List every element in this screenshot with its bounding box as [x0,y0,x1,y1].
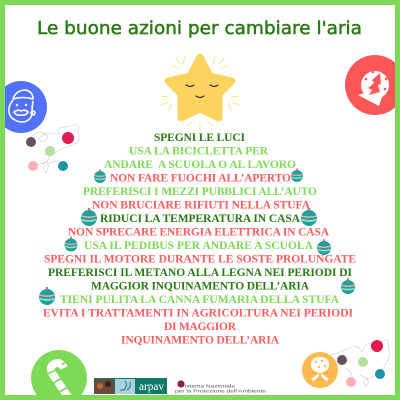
text block: tree of good actions: EVITA I TRATTAMENTI IN AGRICOLTURA NEI PERIODI [43,308,354,320]
logo: Sistema Nazionale: per la Protezione dell'Ambiente [175,388,267,394]
icon: candy cane badge [31,350,87,400]
logo: arpav [94,378,167,394]
text block: tree of good actions: USA LA BICICLETTA PER [129,146,269,158]
logo: Sistema Nazionale [175,380,267,394]
text block: tree of good actions: ANDARE A SCUOLA O AL LAVORO [104,159,296,171]
text block: tree of good actions: TIENI PULITA LA CANNA FUMARIA DELLA STUFA [60,294,340,306]
icon: snow globe badge [345,55,400,115]
text block: tree of good actions: USA IL PEDIBUS PER ANDARE A SCUOLA [84,240,314,252]
logo: Sistema Nazionale: istema Nazionale [185,384,236,388]
text block: tree of good actions: NON FARE FUOCHI ALL’APERTO [110,172,291,184]
text block: tree of good actions: NON BRUCIARE RIFIUTI NELLA STUFA [92,200,311,212]
text block: tree of good actions: INQUINAMENTO DELL’ARIA [121,334,280,346]
text block: tree of good actions: PREFERISCI IL METANO ALLA LEGNA NEI PERIODI DI [48,267,353,279]
garland: right lights [330,340,389,387]
title: Le buone azioni per cambiare l'aria [37,18,362,39]
text block: tree of good actions: SPEGNI LE LUCI [154,132,246,144]
text block: tree of good actions: SPEGNI IL MOTORE DURANTE LE SOSTE PROLUNGATE [44,254,356,266]
logo: arpav: arpav [139,381,164,393]
text block: tree of good actions: RIDUCI LA TEMPERATURA IN CASA [100,213,301,225]
text block: tree of good actions: NON SPRECARE ENERGIA ELETTRICA IN CASA [68,226,330,238]
text block: tree of good actions: PREFERISCI I MEZZI PUBBLICI ALL’AUTO [83,186,317,198]
garland: left lights [26,125,79,173]
icon: smiling star [161,57,239,130]
text block: tree of good actions: MAGGIOR INQUINAMENTO DELL’ARIA [91,280,310,292]
text block: tree of good actions [43,132,356,346]
icon: bow badge [302,352,338,388]
text block: tree of good actions: DI MAGGIOR [164,321,237,333]
icons: tree ornaments [39,168,355,305]
icon: santa badge [0,81,47,133]
